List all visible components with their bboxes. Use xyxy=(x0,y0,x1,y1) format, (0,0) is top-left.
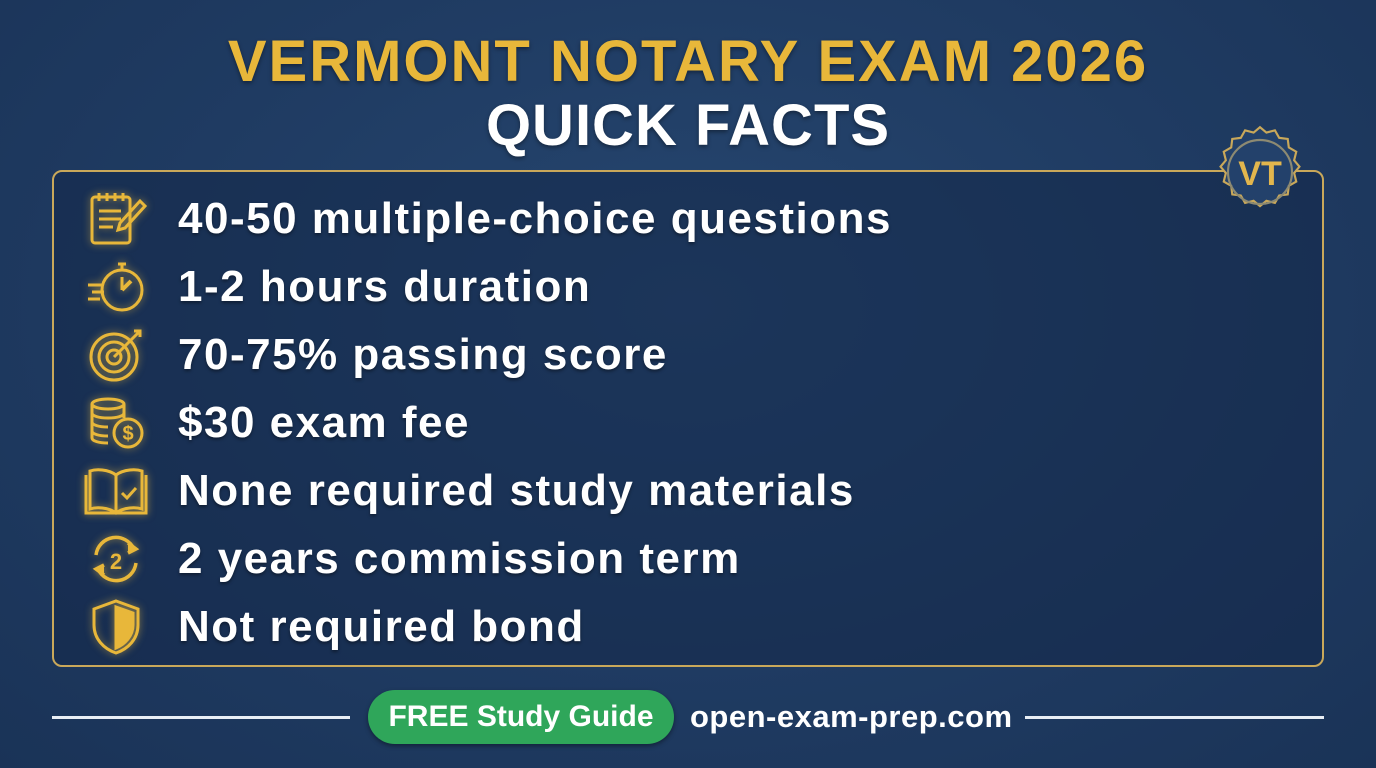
fact: fee: $30 exam fee xyxy=(178,398,470,447)
footer: domain: open-exam-prep.com xyxy=(690,699,1013,734)
footer: study guide button xyxy=(368,690,674,744)
fact: passing score: 70-75% passing score xyxy=(178,330,668,379)
footer: study guide button: FREE Study Guide xyxy=(388,700,654,733)
fact: commission term: 2 xyxy=(110,549,122,574)
fact: bond: Not required bond xyxy=(178,602,585,651)
fact: fee xyxy=(85,392,470,454)
fact: commission term: 2 years commission term xyxy=(178,534,741,583)
fact: duration: 1-2 hours duration xyxy=(178,262,591,311)
fact: study materials: None required study materials xyxy=(178,466,855,515)
subtitle: QUICK FACTS xyxy=(486,93,890,158)
title: VERMONT NOTARY EXAM 2026 xyxy=(228,29,1148,94)
fact: passing score xyxy=(84,324,668,387)
fact: duration xyxy=(85,258,591,316)
badge: VT seal: VT xyxy=(1238,155,1282,193)
fact: fee: $ xyxy=(122,423,134,445)
badge: VT seal xyxy=(1219,126,1301,208)
fact: questions: 40-50 multiple-choice questions xyxy=(178,194,892,243)
panel: facts xyxy=(52,170,1324,667)
fact: bond xyxy=(87,595,585,659)
